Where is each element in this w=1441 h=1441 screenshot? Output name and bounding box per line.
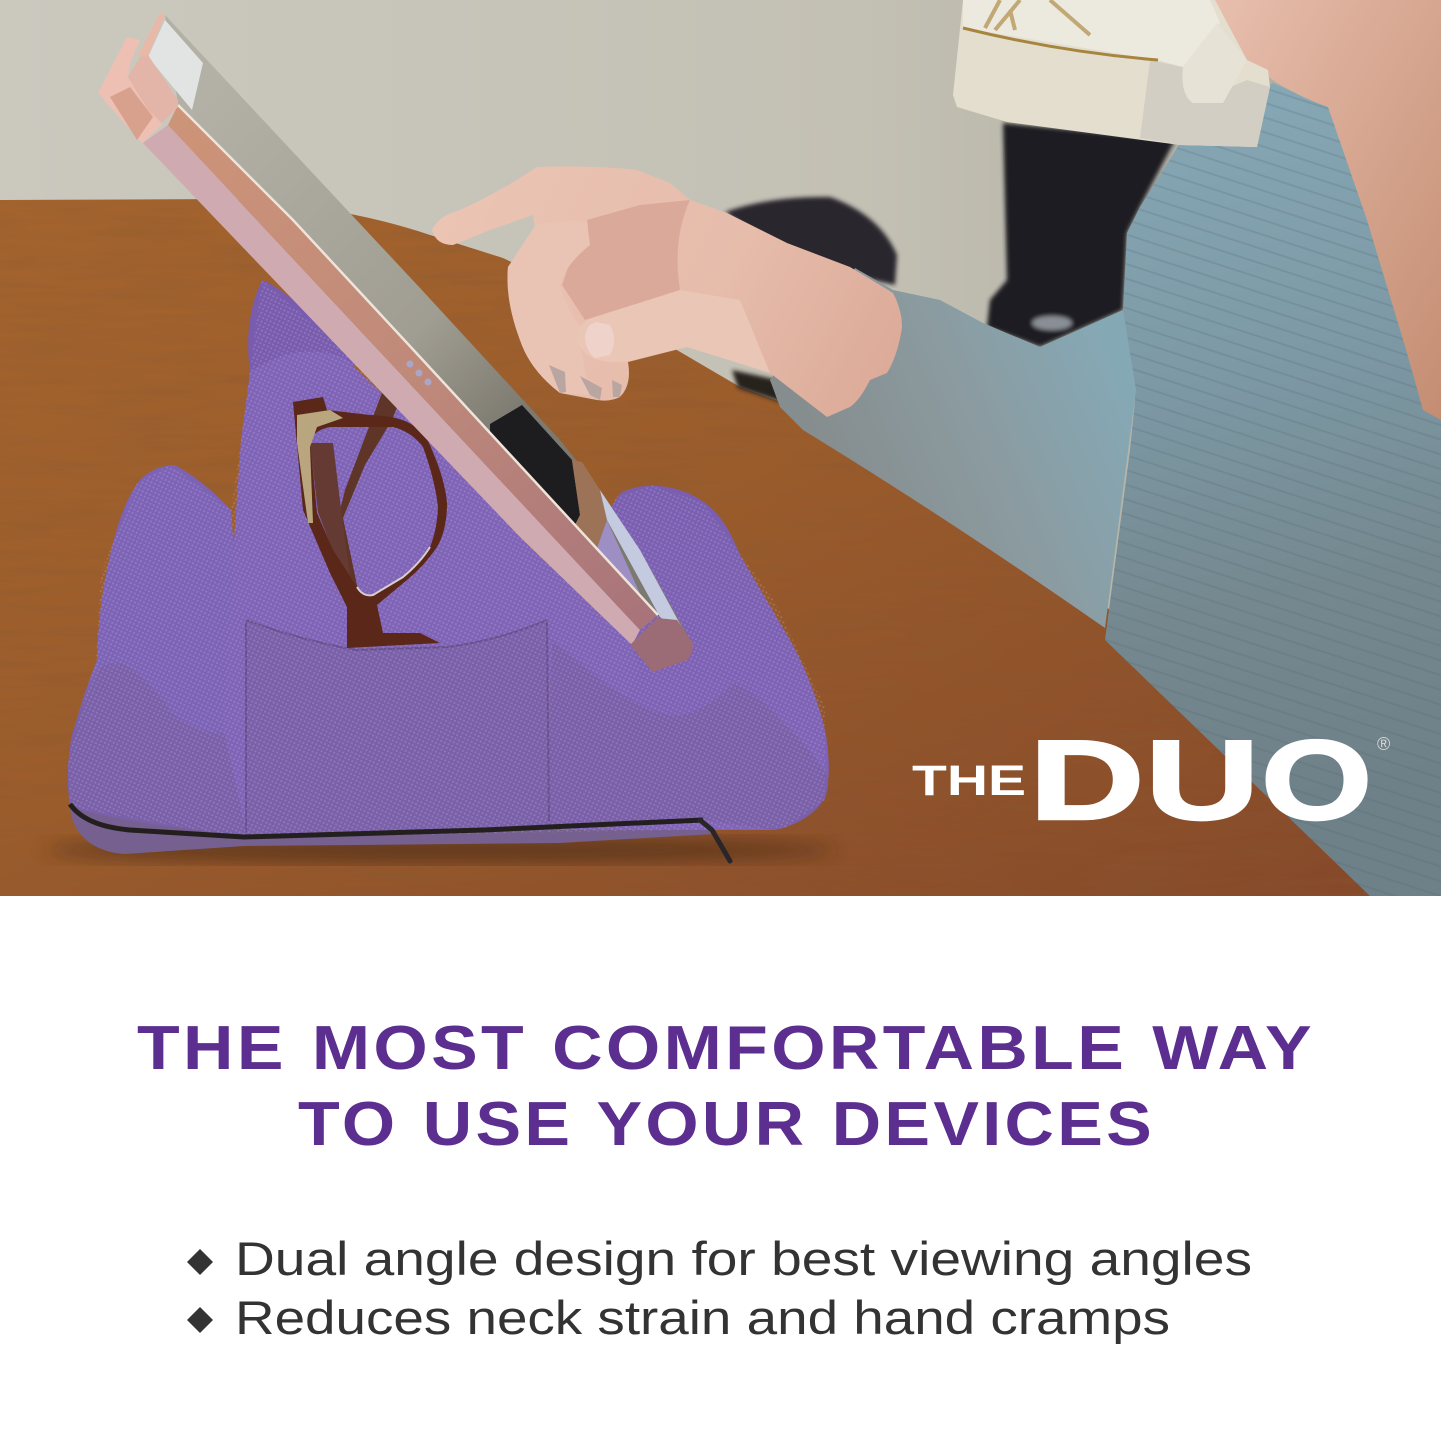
glasses: inner temple bbox=[310, 443, 350, 576]
mug bbox=[953, 0, 1270, 147]
tablet: dark reflection bbox=[490, 405, 580, 525]
logo letter O: O bbox=[1261, 718, 1372, 844]
dark chair behind hand bbox=[725, 197, 897, 405]
heading line 1: THE MOST COMFORTABLE WAY bbox=[137, 1014, 1315, 1083]
tablet: screen mirror bbox=[165, 15, 693, 645]
cushion: left bolster bbox=[68, 465, 234, 804]
tablet: pink cover bbox=[143, 125, 640, 645]
bullet 1 marker bbox=[187, 1249, 213, 1275]
cushion: underside bbox=[70, 808, 712, 854]
mug: gold artwork bbox=[985, 0, 1090, 35]
bullet list bbox=[187, 1232, 1252, 1344]
sweater body bbox=[1105, 83, 1441, 896]
cushion: wedge back bbox=[248, 280, 360, 372]
mug: body bbox=[953, 0, 1270, 147]
hand: finger nails bbox=[549, 365, 622, 400]
mug: gold line bbox=[963, 28, 1158, 60]
tablet: top bumper bbox=[128, 55, 178, 123]
tablet: rose gold frame bbox=[168, 105, 658, 630]
tablet: light reflection bottom bbox=[600, 490, 682, 626]
tablet: cover corner bbox=[98, 37, 162, 143]
wall background bbox=[0, 0, 1441, 896]
cushion: zipper bbox=[70, 804, 703, 837]
logo letter U: U bbox=[1145, 718, 1259, 844]
mug: handle bbox=[1182, 23, 1247, 103]
cushion shadow bbox=[45, 837, 835, 863]
tablet: camera dots bbox=[406, 360, 432, 386]
mug: upper panel bbox=[963, 0, 1220, 67]
cushion: pocket bbox=[246, 620, 549, 835]
hand pointing bbox=[432, 166, 902, 417]
cushion: right front end bbox=[547, 640, 828, 830]
dark stand behind mug bbox=[987, 123, 1175, 347]
tablet: purple reflection bbox=[597, 520, 640, 594]
tablet: light reflection top bbox=[148, 20, 203, 110]
pocket seams bbox=[246, 620, 549, 832]
logo letter D: D bbox=[1029, 718, 1144, 844]
panel: product photo bbox=[0, 0, 1441, 896]
registered mark: ® bbox=[1377, 734, 1390, 754]
fabric weave bbox=[68, 280, 825, 838]
cushion: right bolster bbox=[550, 486, 829, 830]
sweater ribs bbox=[1105, 83, 1441, 896]
tablet: top rail bbox=[138, 13, 165, 57]
wooden table bbox=[0, 190, 1441, 896]
bullet 1 text: Dual angle design for best viewing angles bbox=[235, 1232, 1252, 1285]
tablet: bottom bumper bbox=[630, 618, 693, 672]
bullet 2 text: Reduces neck strain and hand cramps bbox=[235, 1291, 1170, 1344]
tablet: frame highlight bbox=[178, 105, 658, 615]
tablet bbox=[98, 13, 693, 672]
mug: right shade bbox=[1140, 60, 1270, 147]
hand: middle finger bbox=[508, 221, 590, 395]
bullet 2 marker bbox=[187, 1307, 213, 1333]
glasses: lens rim highlight bbox=[357, 547, 430, 595]
glasses: gold glitter bbox=[297, 410, 343, 523]
forearm top right bbox=[1210, 0, 1441, 420]
heading line 2: TO USE YOUR DEVICES bbox=[298, 1090, 1155, 1159]
logo: The Duo bbox=[912, 718, 1390, 844]
cushion: wedge front bbox=[225, 365, 574, 826]
sleeve bbox=[770, 268, 1136, 628]
logo word: THE: THE bbox=[912, 757, 1026, 805]
tablet: tan reflection bbox=[572, 460, 607, 548]
hand: thumb bbox=[577, 290, 770, 373]
cushion bbox=[68, 280, 829, 861]
hand: silhouette bbox=[432, 166, 902, 417]
hand: palm shadow bbox=[562, 200, 690, 320]
hand: thumb nail bbox=[585, 322, 614, 358]
cushion: zipper pull bbox=[700, 820, 730, 861]
heading bbox=[137, 1014, 1315, 1159]
glasses: frame bbox=[293, 397, 447, 648]
cushion: left front end bbox=[68, 663, 246, 835]
tablet: cover corner inner bbox=[110, 87, 153, 140]
glasses bbox=[293, 381, 447, 648]
glasses: temples bbox=[340, 393, 397, 587]
